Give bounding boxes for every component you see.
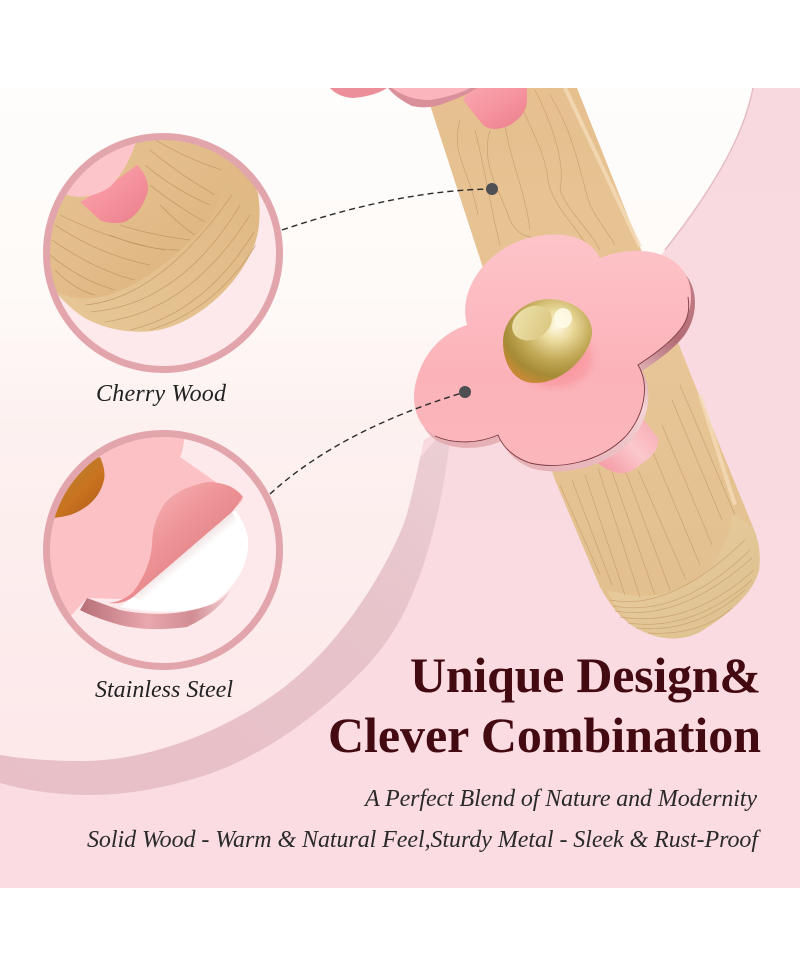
brass knob <box>503 299 592 383</box>
knob glow <box>507 320 603 396</box>
top flower left petal <box>330 88 387 98</box>
brass knob remnant <box>54 457 104 518</box>
steel disc <box>120 510 248 612</box>
right arc edge <box>665 88 753 250</box>
lower peg <box>592 405 658 473</box>
shadow band arc <box>0 420 452 795</box>
wood grain <box>457 90 754 633</box>
callout: wood leader line <box>282 183 498 230</box>
peg <box>80 165 148 223</box>
top peg <box>463 88 527 129</box>
light background shape <box>0 88 753 761</box>
top flower right petal <box>388 88 477 107</box>
wood top face <box>50 248 180 298</box>
callout: steel leader line <box>270 386 471 494</box>
peeled film <box>108 482 243 603</box>
flower sliver <box>66 143 136 197</box>
flower surface <box>50 437 243 616</box>
wooden bar <box>426 88 760 639</box>
wood side <box>56 161 260 332</box>
subheading: A Perfect Blend of Nature and Modernity <box>363 786 757 812</box>
top flower partial <box>330 88 527 129</box>
description: Solid Wood - Warm & Natural Feel,Sturdy Metal - Sleek & Rust-Proof <box>87 827 761 853</box>
wood end cap <box>607 513 760 639</box>
metal rim <box>80 590 230 629</box>
headline <box>328 647 761 763</box>
detail circle: stainless steel <box>30 420 280 667</box>
headline: Clever Combination <box>328 707 761 763</box>
main flower <box>414 234 695 471</box>
label: Cherry Wood: Cherry Wood <box>96 381 227 407</box>
wood highlight stripe <box>565 88 735 505</box>
headline: Unique Design& <box>410 647 761 703</box>
wood grain strokes <box>50 140 256 330</box>
flower rim <box>418 240 695 471</box>
fold shadow <box>134 512 236 600</box>
flower edge hairline <box>435 297 689 465</box>
detail circle: cherry wood <box>45 120 280 370</box>
flower face <box>414 234 691 465</box>
label: Stainless Steel: Stainless Steel <box>95 677 233 703</box>
